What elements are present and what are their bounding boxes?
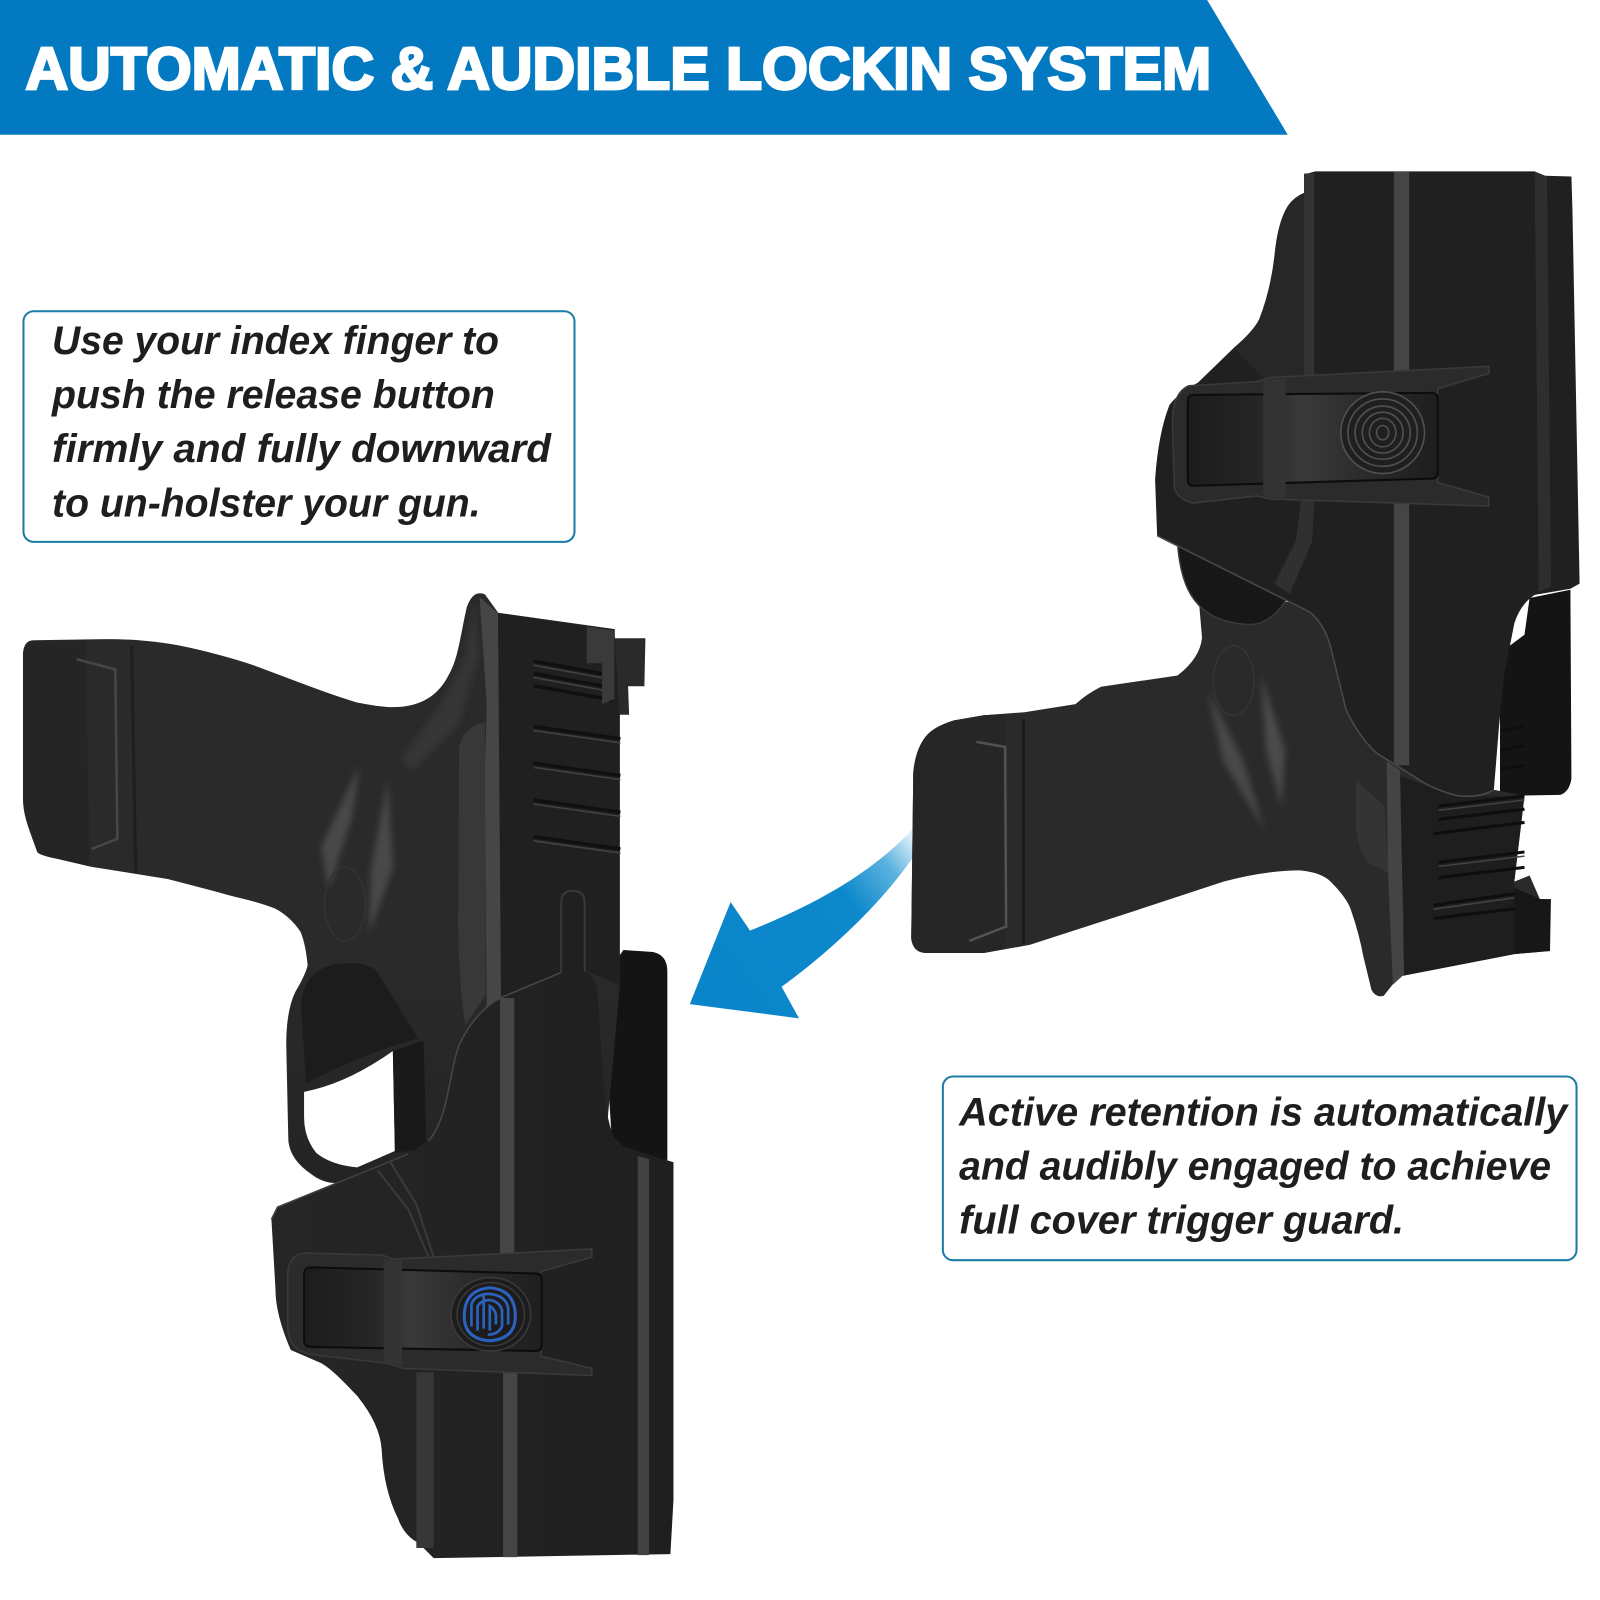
strap hinge [1263, 379, 1286, 498]
belt clip plate [602, 950, 667, 1160]
holster shell [1155, 171, 1580, 796]
belt clip plate [1500, 590, 1571, 796]
arrow: from right holster to left holster [690, 829, 913, 1018]
magazine clip [77, 659, 117, 849]
grip highlights [321, 602, 480, 934]
slide panel [498, 613, 619, 998]
retention strap [288, 1249, 592, 1376]
title: AUTOMATIC & AUDIBLE LOCKIN SYSTEM [26, 35, 1211, 102]
holster shell [271, 970, 673, 1558]
fingerprint spiral [1341, 392, 1424, 473]
right pistol entering holster [911, 171, 1580, 996]
magazine base [911, 714, 1005, 953]
callout: active retention: full cover trigger guard. [959, 1199, 1404, 1243]
callout: active retention: Active retention is automatically [958, 1091, 1569, 1135]
callout: release instructions: Use your index finger to [52, 319, 499, 363]
left holstered pistol [23, 594, 673, 1558]
fingerprint blue [451, 1278, 531, 1351]
rear serrations [534, 661, 620, 853]
callout: active retention [943, 1077, 1577, 1260]
release button [304, 1267, 542, 1351]
slide section [1398, 776, 1524, 977]
callout: release instructions [23, 311, 574, 542]
slide slot [561, 891, 585, 974]
callout: release instructions: to un-holster your gun. [52, 481, 481, 525]
pistol grip and slide [911, 602, 1551, 996]
grip highlights [1208, 676, 1285, 830]
title banner [0, 0, 1288, 135]
retention strap [1172, 366, 1489, 506]
callout: active retention: and audibly engaged to achieve [959, 1145, 1551, 1189]
trigger guard [1178, 543, 1288, 624]
trigger guard opening [301, 963, 418, 1084]
holster ribs [500, 998, 514, 1253]
grip oval panel [1213, 646, 1254, 715]
callout: release instructions: push the release button [51, 373, 495, 417]
callout: release instructions: firmly and fully downward [52, 427, 552, 471]
holster ribs [1394, 171, 1409, 382]
rear serrations [1434, 796, 1524, 918]
slide grey band [480, 597, 501, 1006]
release button [1188, 393, 1438, 486]
magazine base [23, 641, 90, 866]
strap hinge [384, 1259, 402, 1365]
magazine clip [969, 742, 1006, 941]
pistol grip and frame [23, 594, 645, 1183]
